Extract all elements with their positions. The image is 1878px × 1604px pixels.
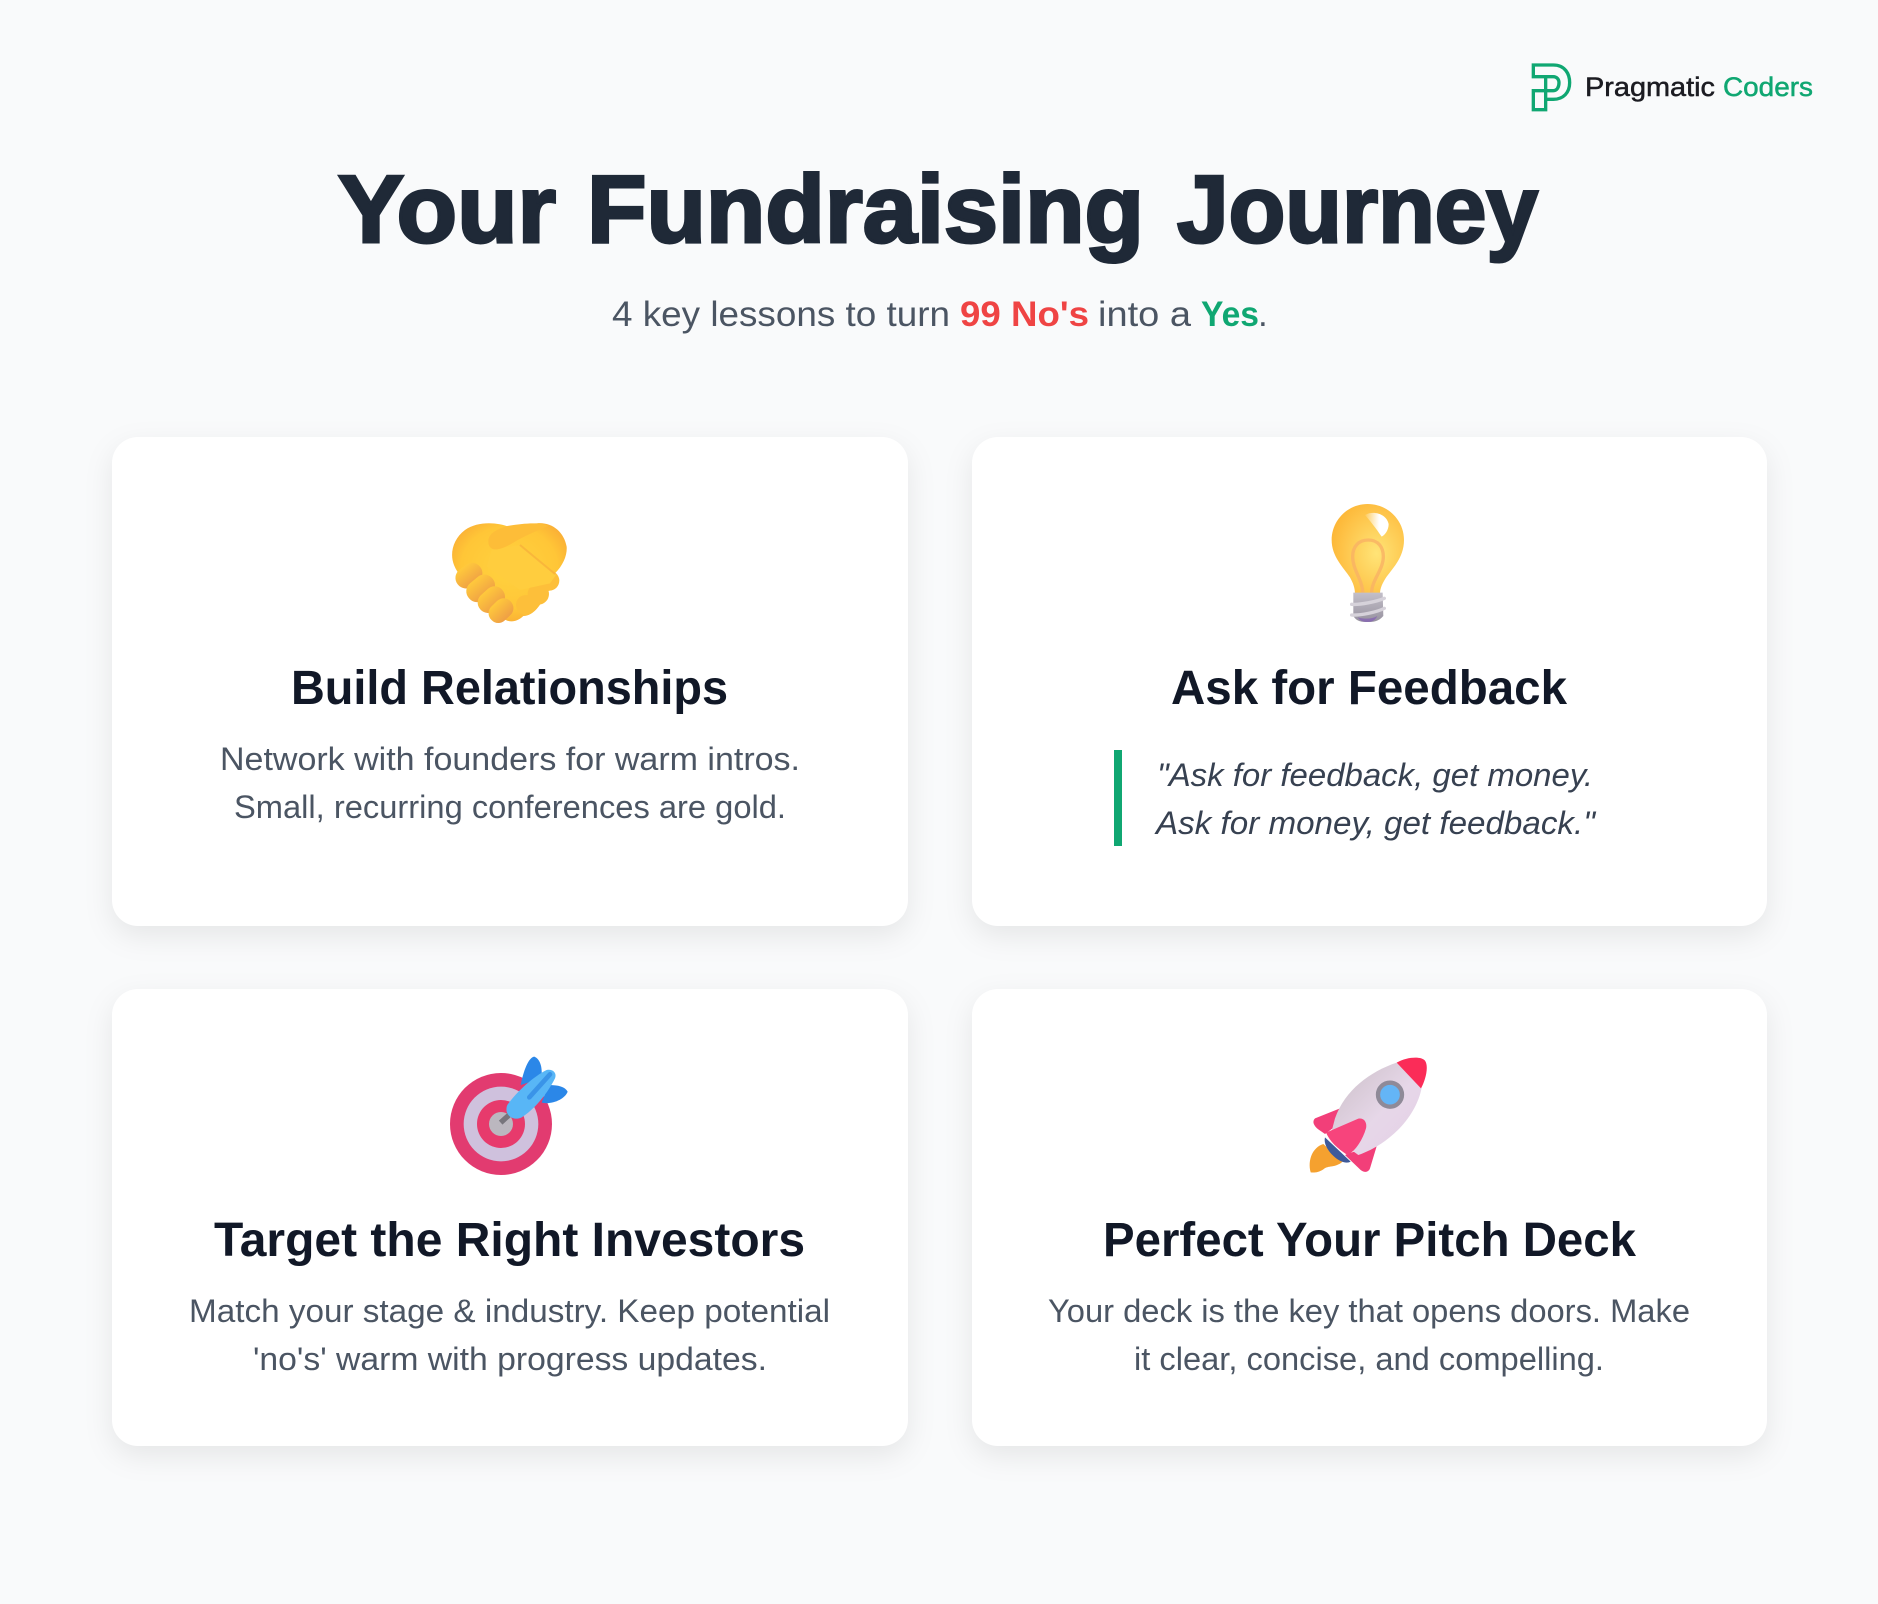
icon: light bulb (1332, 504, 1404, 622)
panel: ask for feedback (972, 437, 1767, 926)
heading: Build Relationships (291, 662, 728, 715)
body text: Your deck is the key that opens doors. Make (1048, 1293, 1690, 1329)
subtitle: 99 No's (960, 295, 1089, 334)
logo wordmark: Coders (1723, 72, 1813, 102)
body text: it clear, concise, and compelling. (1134, 1341, 1604, 1377)
panel: target the right investors (112, 989, 908, 1446)
panel: build relationships (112, 437, 908, 926)
title: Journey (1177, 156, 1538, 263)
body text: 'no's' warm with progress updates. (253, 1341, 767, 1377)
body text: Network with founders for warm intros. (220, 741, 800, 777)
logo: Pragmatic Coders (1533, 65, 1813, 110)
heading: Target the Right Investors (214, 1214, 805, 1267)
callout: quote (1114, 750, 1597, 846)
panel: perfect your pitch deck (972, 989, 1767, 1446)
logo wordmark: Pragmatic (1585, 72, 1715, 102)
title: Fundraising (587, 156, 1144, 263)
subtitle: . (1258, 295, 1268, 334)
callout: quote: "Ask for feedback, get money. (1157, 757, 1593, 793)
heading: Ask for Feedback (1171, 662, 1567, 715)
body text: Match your stage & industry. Keep potential (189, 1293, 830, 1329)
heading: Perfect Your Pitch Deck (1103, 1214, 1636, 1267)
body text (1048, 1293, 1690, 1377)
icon: target with dart (450, 1057, 568, 1175)
callout: quote: Ask for money, get feedback." (1154, 805, 1597, 841)
subtitle: into a (1098, 295, 1192, 334)
icon: handshake (451, 523, 567, 627)
icon: logo mark (1533, 65, 1570, 110)
icon: rocket (1310, 1058, 1427, 1172)
title: Your (338, 156, 556, 263)
subtitle: Yes (1201, 295, 1259, 334)
subtitle: 4 key lessons to turn (612, 295, 950, 334)
body text (220, 741, 800, 825)
title (338, 156, 1538, 263)
body text: Small, recurring conferences are gold. (234, 789, 786, 825)
body text (189, 1293, 830, 1377)
subtitle (612, 295, 1268, 334)
